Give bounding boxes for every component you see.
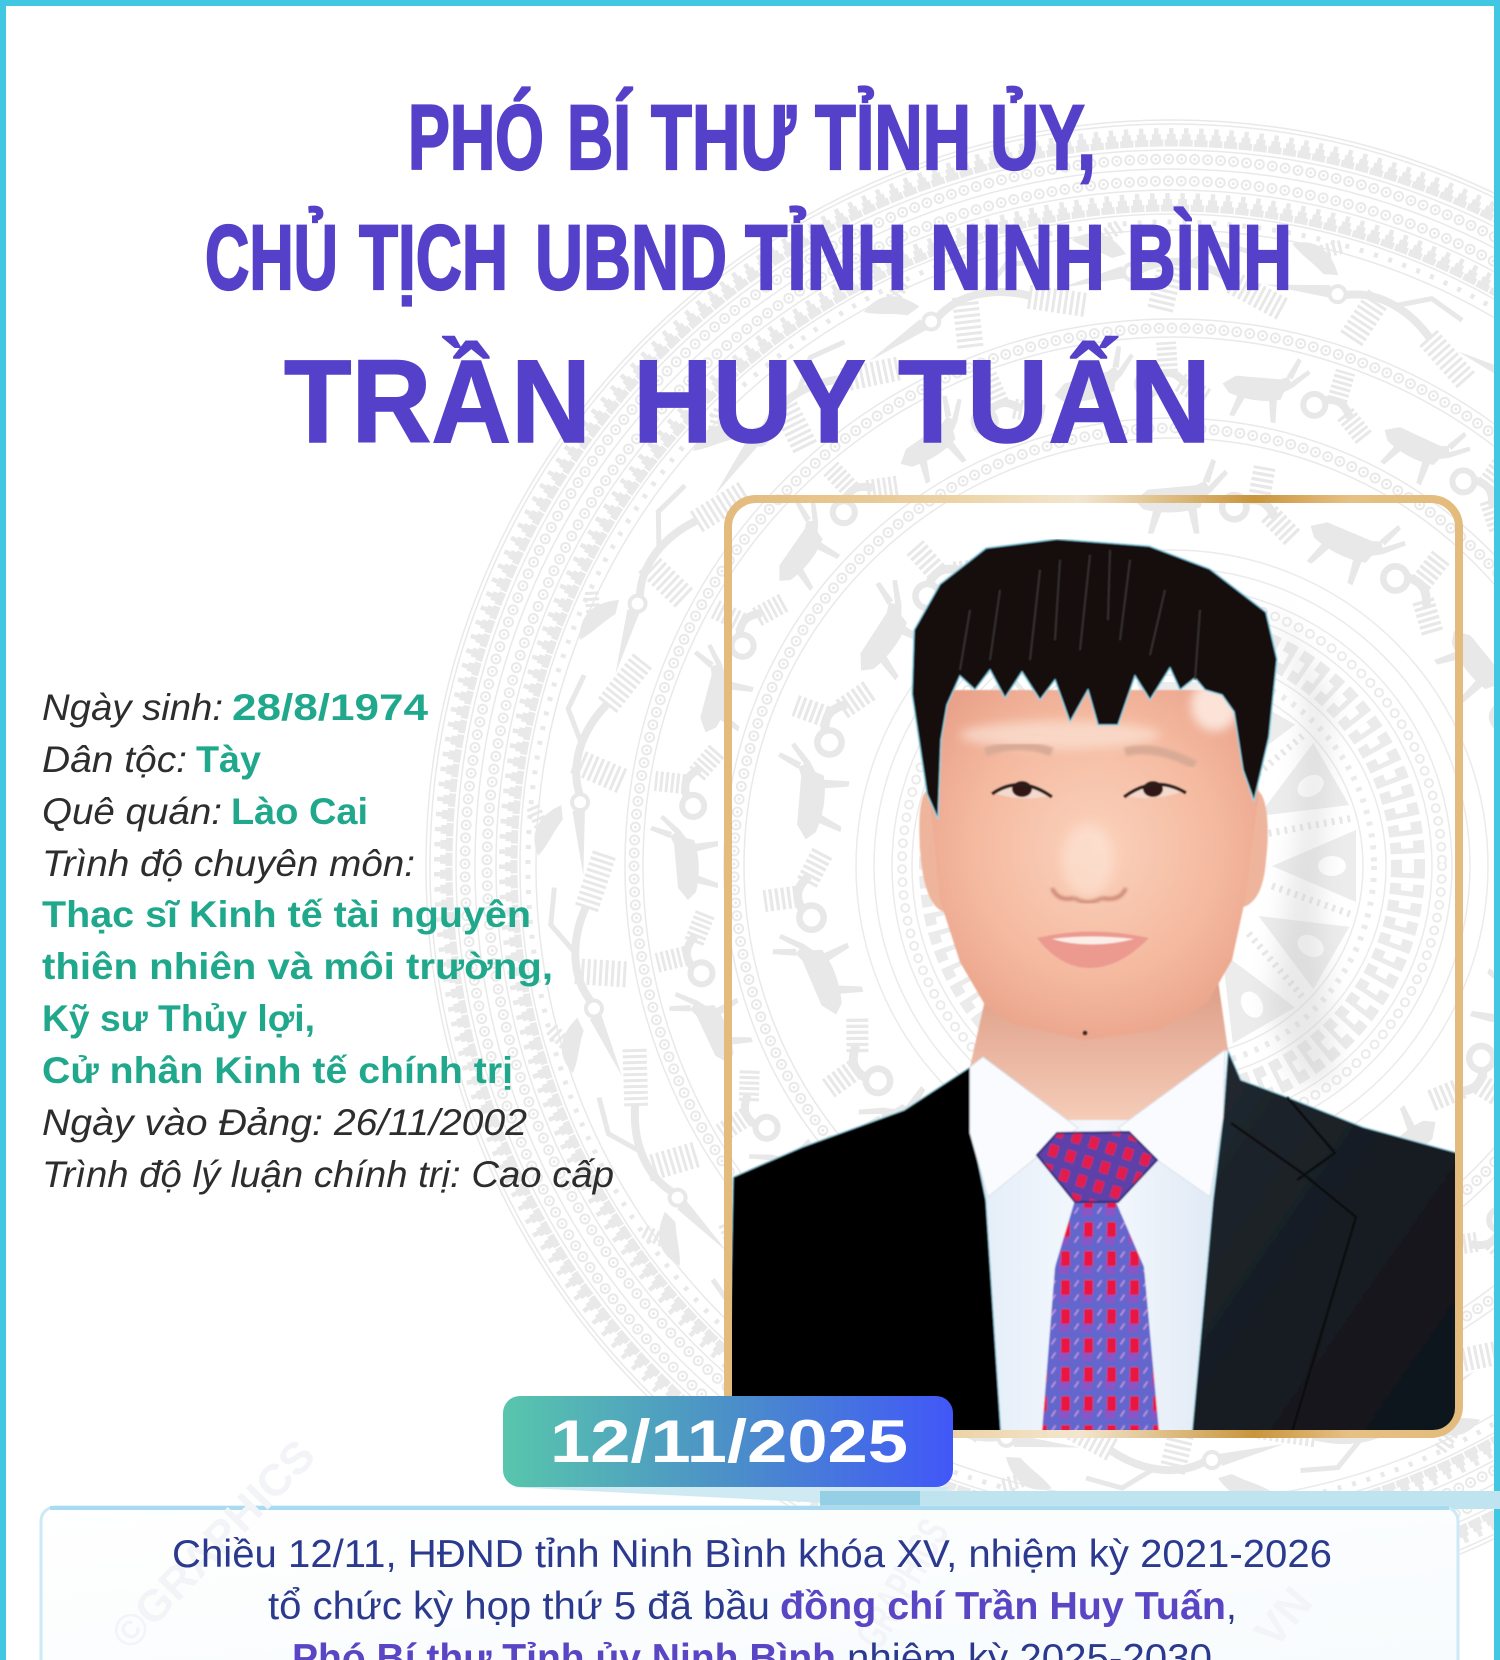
tie blade: [1042, 1200, 1159, 1432]
title: [205, 86, 1292, 468]
title line 1: ỦY,: [990, 86, 1096, 189]
hometown: Quê quán:: [42, 791, 222, 832]
birth date: 28/8/1974: [232, 687, 428, 728]
qualifications: Thạc sĩ Kinh tế tài nguyên: [42, 894, 531, 935]
nose: [1052, 888, 1126, 902]
tie: [1037, 1132, 1159, 1432]
hometown: [42, 791, 368, 832]
portrait: [728, 539, 1458, 1432]
card background: [41, 1507, 1458, 1660]
hair: [912, 539, 1277, 819]
ribbon light: [920, 1491, 1500, 1509]
card watermark: GRAPHICS: [846, 1511, 959, 1657]
hometown: Lào Cai: [231, 791, 368, 832]
description card: [41, 1431, 1458, 1660]
badge date: 12/11/2025: [550, 1408, 908, 1475]
photo body: [728, 539, 1458, 1432]
card text: [172, 1533, 1332, 1660]
party date: Ngày vào Đảng: 26/11/2002: [42, 1102, 527, 1143]
tie knot: [1037, 1132, 1157, 1202]
drum inner animal ring: [672, 459, 1500, 1327]
nose highlight: [1062, 824, 1114, 896]
shirt: [975, 1120, 1220, 1432]
title line 2: TỊCH: [359, 207, 508, 309]
card top edge: [50, 1506, 1449, 1510]
card watermark: [102, 1431, 1322, 1659]
drum outer bands: [426, 120, 1500, 1612]
drum deer and bird ring: [502, 229, 1500, 1503]
title line 1: TỈNH: [815, 86, 971, 189]
title line 2: [205, 206, 1292, 309]
collar left: [970, 1057, 1078, 1197]
portrait shadow: [1268, 600, 1335, 1085]
ethnicity: [42, 739, 261, 780]
mouth: [1037, 932, 1149, 968]
birth date: [42, 687, 428, 728]
card watermark: VN: [1245, 1578, 1322, 1656]
drum crane ring: [293, 193, 1500, 1660]
line 2: ,: [1226, 1585, 1237, 1628]
drum third bands: [724, 418, 1500, 1314]
brows: [985, 746, 1195, 765]
birth date: Ngày sinh:: [42, 687, 223, 728]
drum middle bands: [625, 319, 1500, 1413]
ribbon shadow triangle: [510, 1487, 950, 1508]
qualifications: thiên nhiên và môi trường,: [42, 946, 553, 987]
qualifications: [42, 894, 553, 1091]
left ear: [919, 790, 944, 912]
ethnicity: Tày: [196, 739, 261, 780]
title line 2: BÌNH: [1127, 206, 1292, 309]
qualifications: Cử nhân Kinh tế chính trị: [42, 1050, 513, 1091]
line 1: Chiều 12/11, HĐND tỉnh Ninh Bình khóa XV, nhiệm kỳ 2021-2026: [172, 1533, 1332, 1576]
right eye: [1124, 781, 1186, 798]
suit right: [1192, 1050, 1458, 1432]
line 2: đồng chí Trần Huy Tuấn: [780, 1585, 1226, 1628]
line 3: [292, 1637, 1212, 1660]
title line 1: BÍ: [567, 86, 633, 189]
title line 1: [408, 86, 1096, 189]
ethnicity: Dân tộc:: [42, 739, 187, 780]
ribbon band: [510, 1487, 1500, 1509]
ribbon dark: [820, 1491, 920, 1509]
temple highlight: [960, 721, 1160, 749]
title line 2: TỈNH: [745, 206, 907, 309]
political theory: Trình độ lý luận chính trị: Cao cấp: [42, 1154, 614, 1195]
hair highlights: [960, 550, 1200, 680]
title line 1: THƯ: [651, 87, 796, 189]
line 2: tổ chức kỳ họp thứ 5 đã bầu: [268, 1585, 770, 1628]
neck: [970, 980, 1228, 1132]
title name: TRẦN: [284, 335, 591, 468]
profile details: [42, 687, 614, 1195]
portrait frame: [728, 499, 1459, 1434]
title line 2: UBND: [535, 207, 727, 309]
title line 2: NINH: [930, 207, 1105, 309]
date badge: [503, 1396, 953, 1487]
title line 2: CHỦ: [205, 206, 338, 309]
drum centre wedges: [988, 682, 1356, 1050]
chin mole: [1082, 1030, 1088, 1036]
title name: [284, 335, 1211, 468]
right ear: [1240, 790, 1268, 908]
jacket lapel: [1231, 1097, 1356, 1432]
left eye: [992, 781, 1052, 798]
card watermark: ©GRAPHICS: [102, 1431, 325, 1659]
title line 1: PHÓ: [408, 86, 544, 189]
qualification label: Trình độ chuyên môn:: [42, 843, 415, 884]
title name: HUY: [633, 336, 866, 468]
collar right: [1118, 1050, 1225, 1197]
suit left: [728, 1067, 1001, 1432]
bronze drum watermark: [293, 120, 1500, 1660]
badge background: [503, 1396, 953, 1487]
watermark: ©GRAPHICS: [102, 1431, 325, 1659]
face: [930, 690, 1260, 1040]
forehead highlight: [1191, 679, 1239, 731]
head: [912, 539, 1277, 1040]
line 2: [268, 1585, 1237, 1628]
qualifications: Kỹ sư Thủy lợi,: [42, 998, 315, 1039]
drum inner bands: [856, 550, 1488, 1182]
title name: TUẤN: [898, 335, 1211, 468]
